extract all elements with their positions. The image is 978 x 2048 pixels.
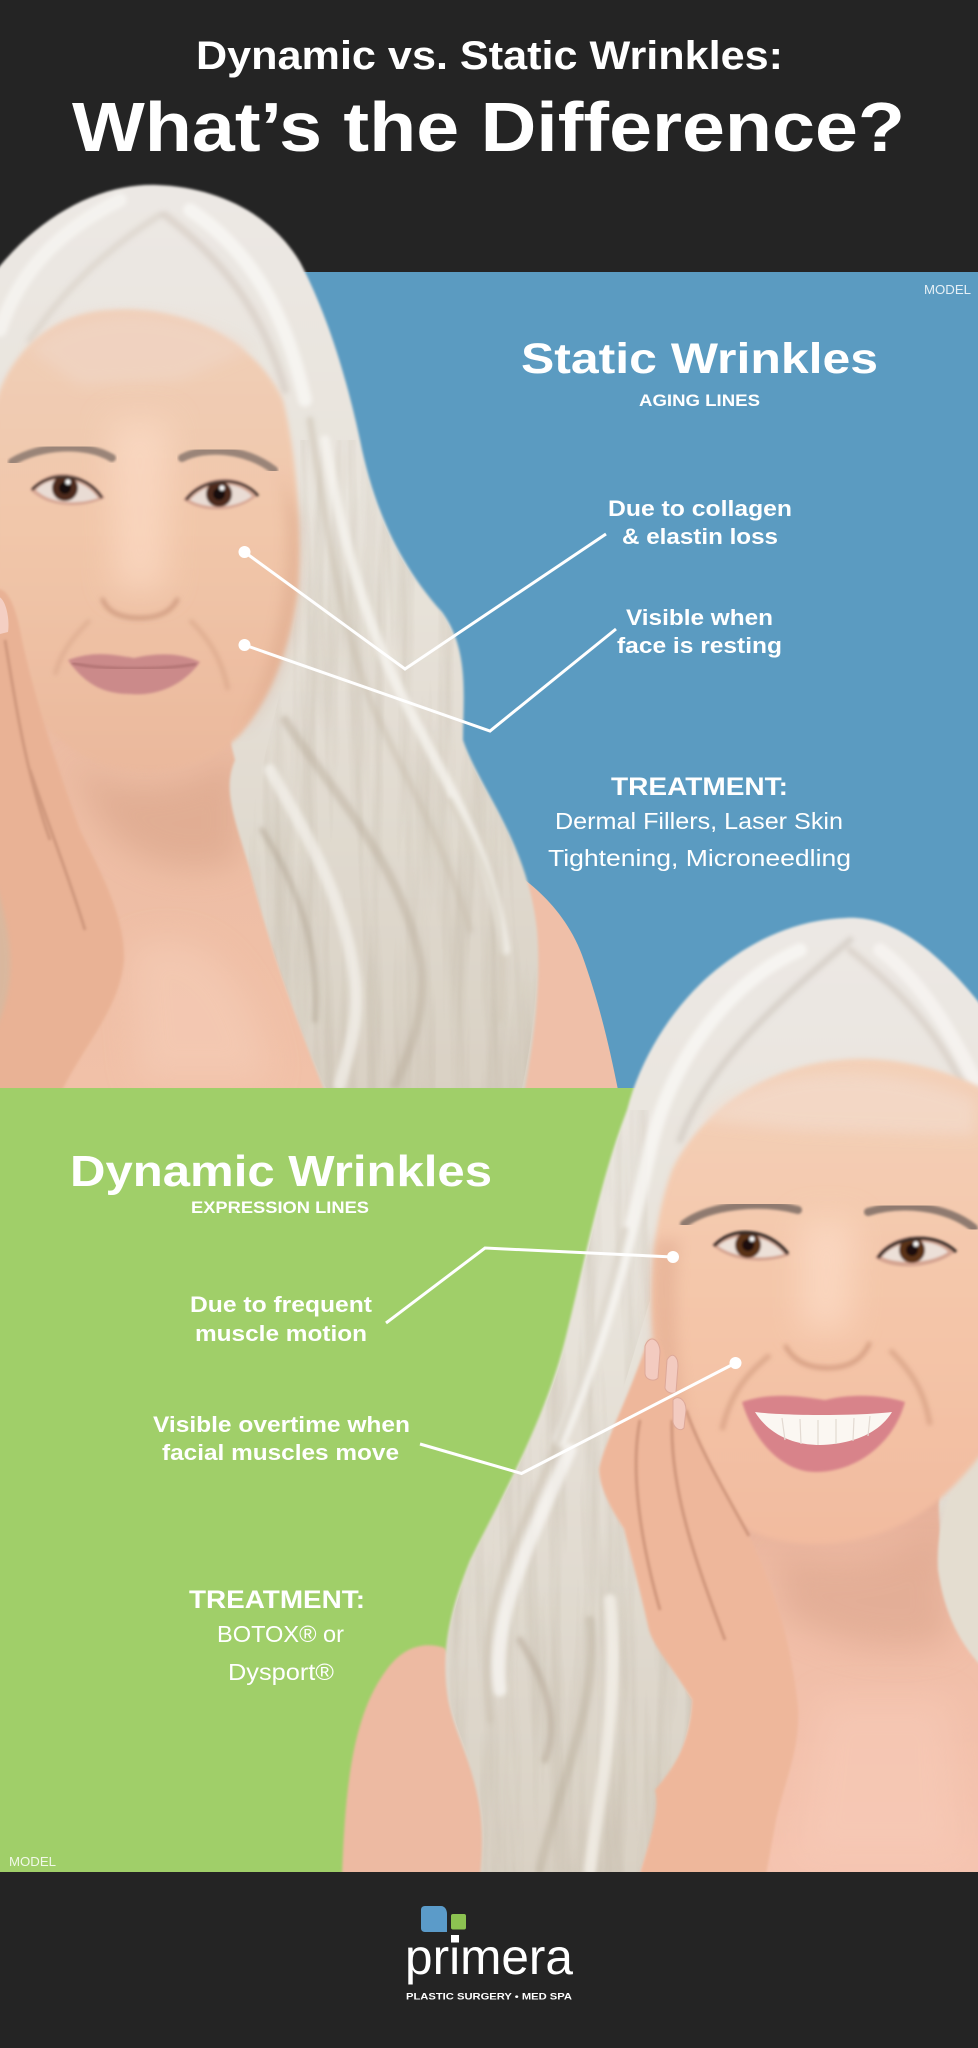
title: What’s the Difference? [72,88,905,166]
text block: dynamic wrinkles: Dysport® [228,1659,334,1685]
static wrinkles callout lines [238,534,616,731]
raised hand [599,1339,798,1875]
raised hand [0,589,124,1095]
text block: static wrinkles: Tightening, Microneedling [548,845,851,871]
panel: dynamic wrinkles green background [0,1088,978,1872]
brows [12,447,112,462]
photo: smiling older woman with white hair [342,918,978,1880]
eyes [712,1231,956,1267]
smile [742,1396,905,1472]
text block: static wrinkles: Static Wrinkles [521,335,878,383]
text block: static wrinkles: Dermal Fillers, Laser Skin [555,808,843,834]
model note: green panel: MODEL [9,1855,56,1869]
text block: static wrinkles [521,335,878,871]
text block: static wrinkles: Visible when [626,605,773,630]
text block: static wrinkles: AGING LINES [639,391,760,410]
text block: static wrinkles: & elastin loss [622,524,778,549]
text block: static wrinkles: TREATMENT: [611,773,788,801]
brows [684,1205,798,1224]
text block: dynamic wrinkles: TREATMENT: [189,1586,365,1614]
logo: primera: primera [405,1929,573,1985]
logo: primera: PLASTIC SURGERY • MED SPA [406,1992,573,2002]
lips [68,654,200,694]
photo: resting older woman with white hair [0,185,618,1100]
nose and creases [55,598,228,690]
text block: static wrinkles: Due to collagen [608,496,792,521]
eyes [30,474,258,510]
text block: dynamic wrinkles: muscle motion [195,1321,367,1346]
dynamic wrinkles callout lines [386,1248,742,1474]
text block: dynamic wrinkles: Visible overtime when [153,1412,410,1437]
title: Dynamic vs. Static Wrinkles: [196,34,783,78]
text block: dynamic wrinkles: Due to frequent [190,1292,373,1317]
text block: dynamic wrinkles: facial muscles move [162,1440,399,1465]
title [72,34,905,166]
model note: blue panel: MODEL [924,283,971,297]
footer dark band [0,1872,978,2048]
text block: dynamic wrinkles: BOTOX® or [217,1621,344,1647]
text block: dynamic wrinkles: EXPRESSION LINES [191,1198,369,1217]
text block: dynamic wrinkles: Dynamic Wrinkles [70,1147,492,1196]
text block: static wrinkles: face is resting [617,633,782,658]
text block: dynamic wrinkles [70,1147,492,1685]
nose and smile creases [722,1342,930,1430]
logo: primera [405,1906,573,2002]
logo mark squares [421,1906,466,1942]
top dark header band [0,0,978,272]
panel: static wrinkles blue background [0,272,978,1088]
